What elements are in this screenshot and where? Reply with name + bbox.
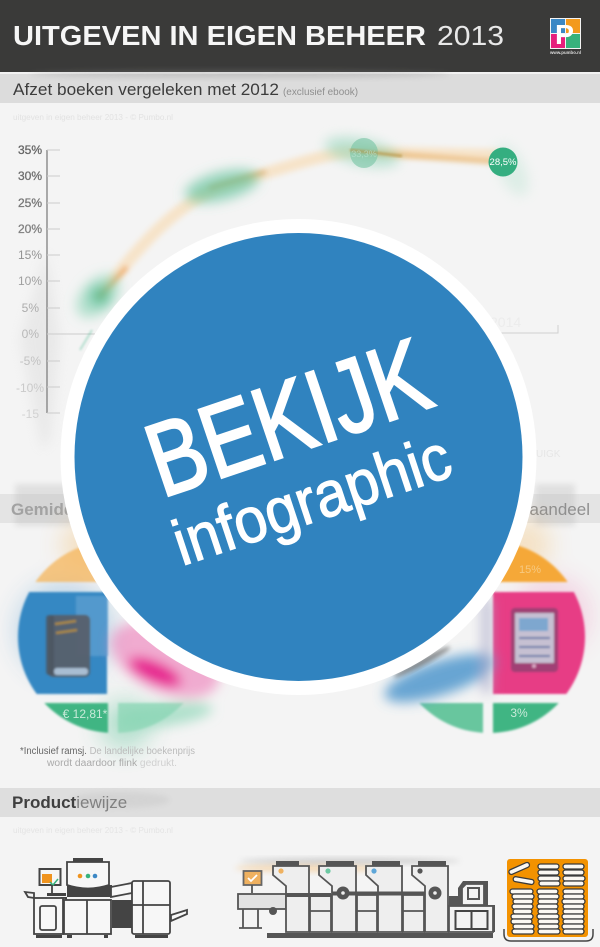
pie glow	[15, 521, 151, 751]
slice: green left	[419, 702, 484, 734]
section band: price and market share	[0, 484, 600, 526]
footnote: wordt daardoor flink gedrukt.	[46, 758, 177, 769]
towers	[273, 866, 309, 932]
series smear	[100, 152, 500, 296]
slice: blue right	[76, 596, 108, 656]
title: UITGEVEN IN EIGEN BEHEER	[13, 20, 426, 51]
tilted books	[508, 862, 530, 875]
marker: smeared 2010	[68, 266, 128, 326]
output tray	[171, 910, 187, 921]
watermark: production: uitgeven in eigen beheer 2013 - © Pumbo.nl	[13, 826, 173, 835]
heading: sales: Afzet boeken vergeleken met 2012	[13, 80, 279, 99]
section band: production	[0, 788, 600, 817]
footnote	[20, 746, 195, 769]
pie slices	[16, 546, 184, 734]
y axis labels: -15	[22, 407, 39, 421]
logo: P	[555, 19, 574, 50]
icon: digital press	[25, 858, 187, 938]
section band: sales heading	[0, 70, 600, 103]
slice: orange	[34, 546, 96, 584]
y axis labels: 0%	[22, 327, 39, 341]
slice: shadow streak	[392, 644, 452, 680]
pie slices	[419, 544, 587, 734]
label: price: € 12,81*	[63, 707, 108, 721]
icon: e-reader	[511, 608, 558, 672]
marker: 28,5%: 28,5%	[490, 157, 517, 168]
table	[238, 894, 286, 909]
y axis labels: 20%	[18, 222, 42, 236]
cabinets	[64, 900, 111, 934]
y axis labels	[16, 143, 44, 421]
label: orange share: 15%	[519, 564, 541, 576]
slice: blue smear	[380, 598, 500, 712]
icon: stacks of books	[504, 859, 593, 941]
watermark: chart: uitgeven in eigen beheer 2013 - © Pumbo.nl	[13, 113, 173, 122]
y axis labels: -5%	[20, 354, 41, 368]
slice: magenta smear	[99, 606, 231, 733]
status lights	[78, 874, 82, 878]
monitor	[40, 869, 60, 885]
ghost label: UIGK	[536, 449, 561, 460]
slice: blue	[15, 592, 107, 694]
icon: offset press	[235, 858, 495, 938]
y axis	[47, 150, 100, 413]
call to action badge	[60, 219, 536, 695]
badge word: infographic: infographic	[164, 420, 460, 579]
y axis labels: 15%	[18, 248, 42, 262]
y axis labels: -10%	[16, 381, 44, 395]
heading note: (exclusief ebook)	[283, 87, 358, 98]
heading: price: Gemiddelde prijs	[11, 500, 149, 519]
y axis smear	[20, 250, 60, 450]
feeder	[25, 892, 34, 898]
y axis labels: 25%	[18, 196, 42, 210]
line chart	[16, 131, 561, 460]
feet	[36, 935, 168, 938]
ghost label 2014: 2014	[490, 314, 521, 330]
heading: production: Productiewijze	[12, 793, 127, 812]
dark base	[60, 885, 112, 900]
book piles	[508, 862, 585, 934]
label: green share: 3%	[510, 706, 528, 720]
tower caps	[276, 861, 446, 866]
title year: 2013	[437, 20, 504, 51]
slice: magenta	[493, 592, 588, 694]
footnote: *Inclusief ramsj. De landelijke boekenprijs	[20, 746, 195, 757]
marker: smeared 2011	[182, 163, 262, 209]
smear	[235, 864, 385, 872]
between units	[310, 895, 424, 932]
icon: book	[46, 615, 90, 677]
indicator lights	[278, 868, 284, 874]
lower smear	[80, 330, 92, 350]
logo	[549, 18, 581, 55]
header bar	[0, 0, 600, 74]
monitor	[244, 871, 262, 885]
y axis labels: 35%	[18, 143, 42, 157]
column three	[563, 864, 584, 869]
pie glow	[499, 519, 592, 655]
column one	[510, 889, 533, 894]
badge word: BEKIJK: BEKIJK	[132, 317, 444, 520]
connector	[111, 883, 132, 897]
press body	[67, 862, 109, 888]
heading: share: Marktaandeel	[487, 500, 590, 519]
y axis labels: 30%	[18, 169, 42, 183]
slice: green right	[117, 702, 184, 734]
pie: right	[380, 519, 592, 737]
y axis labels: 10%	[18, 274, 42, 288]
tick	[500, 325, 558, 333]
logo: www.pumbo.nl	[549, 50, 581, 55]
marker: 28,5%	[488, 139, 536, 201]
delivery unit	[448, 881, 495, 932]
pie: left	[15, 521, 231, 751]
marker: smeared 2012	[322, 131, 402, 173]
slice: green	[492, 701, 560, 734]
slice: orange	[500, 544, 569, 584]
marker: smeared 2012: 33,3%	[351, 149, 377, 159]
column two	[538, 864, 559, 869]
rollers	[269, 907, 277, 915]
finisher	[132, 881, 170, 934]
base	[267, 933, 493, 938]
slice: green	[44, 703, 108, 737]
y axis labels: 5%	[22, 301, 39, 315]
